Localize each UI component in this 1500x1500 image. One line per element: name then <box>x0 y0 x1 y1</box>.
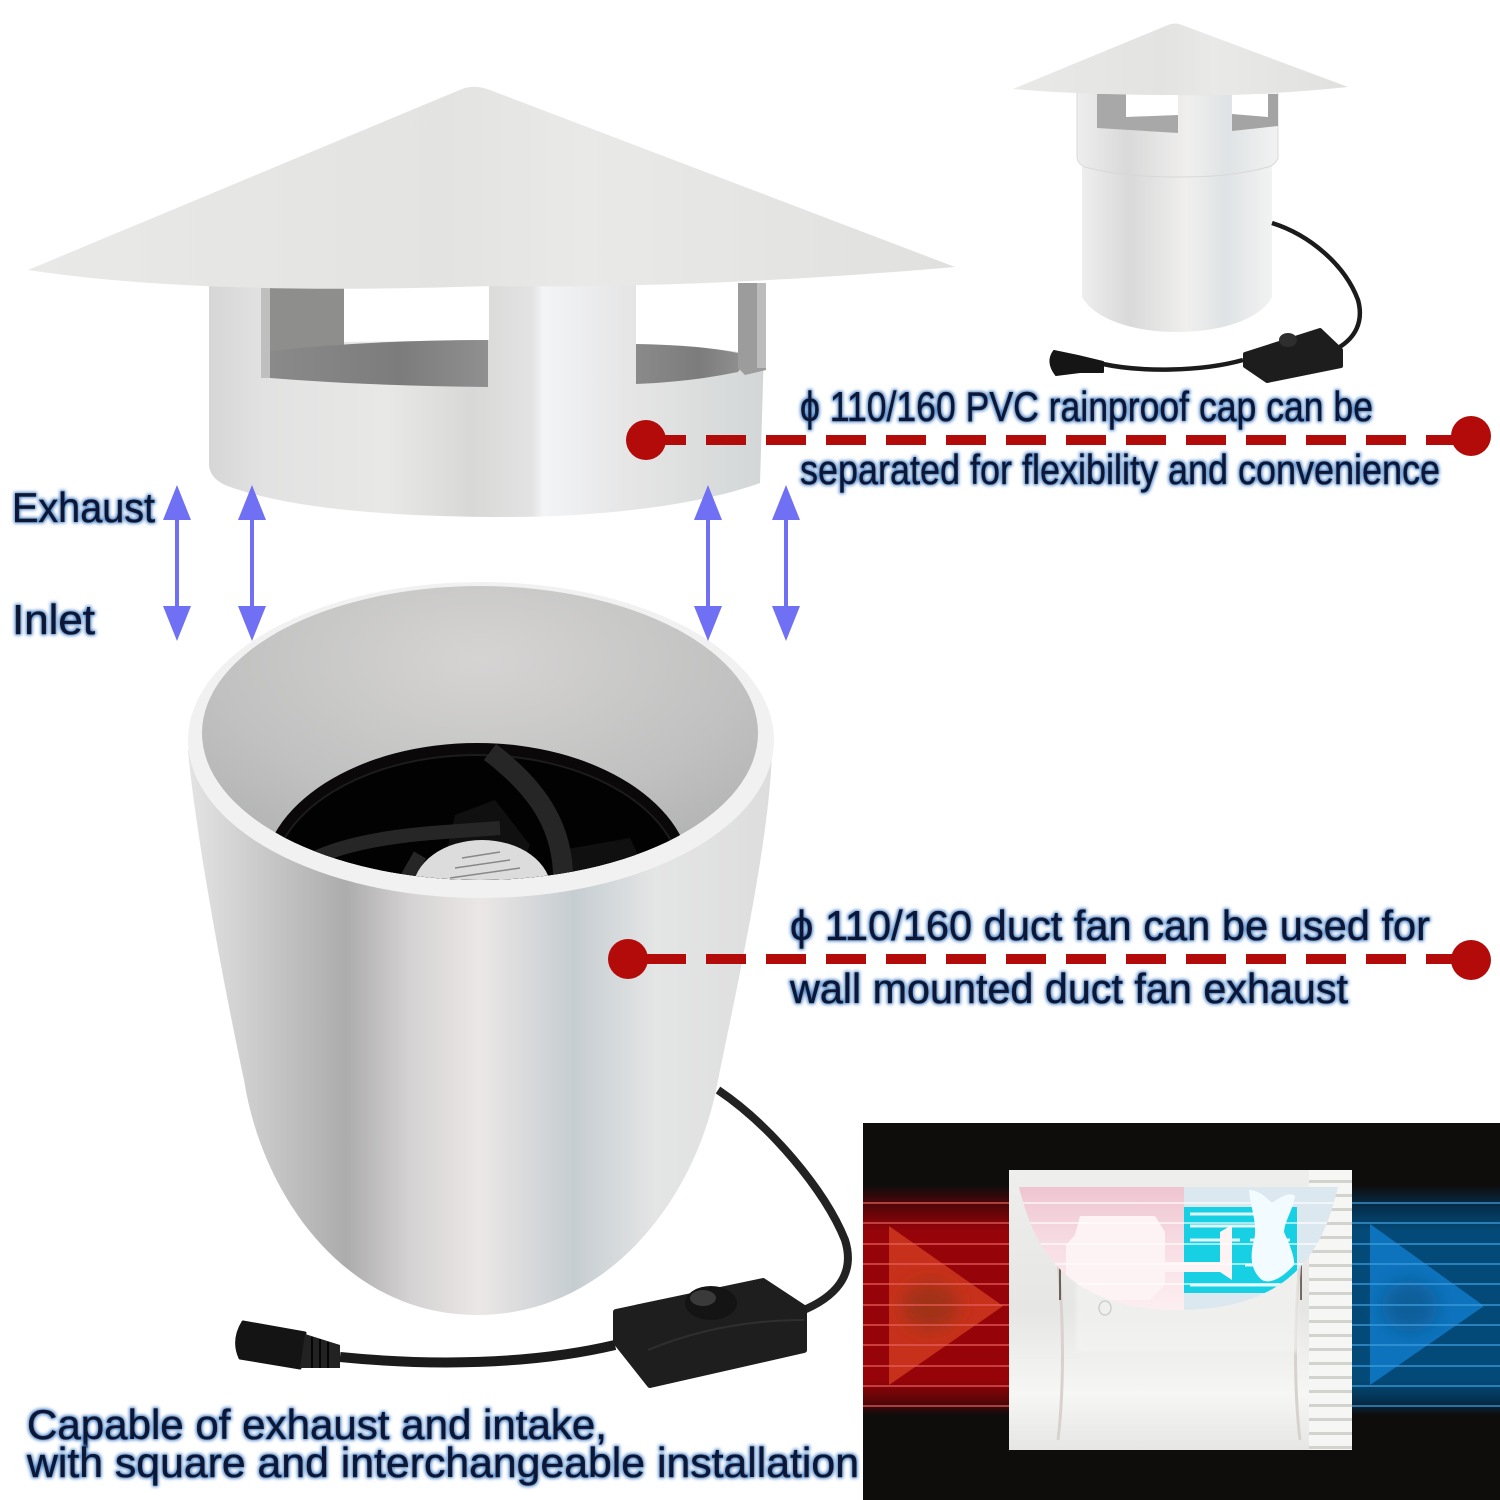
duct fan housing (large) <box>188 582 848 1315</box>
motor silhouette <box>1066 1216 1232 1292</box>
small power cable <box>1103 223 1360 370</box>
body grooves <box>1058 1262 1062 1440</box>
right vent opening <box>636 283 770 384</box>
rainproof cap (large) <box>28 87 955 517</box>
DC connector <box>237 1322 340 1368</box>
callout: duct fan <box>608 902 1491 1012</box>
left vent opening <box>261 283 489 387</box>
arrow 2 <box>238 485 266 641</box>
cap body <box>209 283 766 517</box>
switch knob <box>685 1286 737 1320</box>
inline switch and connector (large) <box>237 1281 804 1385</box>
housing interior <box>202 586 758 880</box>
cooling circuit block <box>1184 1207 1297 1293</box>
arrow 4 <box>772 485 800 641</box>
blue flow arrow <box>1370 1224 1484 1385</box>
power cable <box>718 1090 848 1312</box>
airflow arrows <box>163 485 800 641</box>
small cap vents <box>1097 94 1278 133</box>
dashed leader line <box>608 939 1491 980</box>
fan blades <box>440 800 650 880</box>
caption line 2: with square and interchangeable installation <box>26 1439 859 1486</box>
panel: airflow diagram <box>863 1123 1500 1500</box>
switch cable <box>340 1345 615 1362</box>
callout text line 2: wall mounted duct fan exhaust <box>789 965 1348 1012</box>
blue flow lines <box>1352 1203 1500 1406</box>
housing outer wall <box>188 750 772 1315</box>
dashed leader line <box>626 416 1491 460</box>
fan visible inside housing <box>276 743 680 880</box>
fan frame <box>276 743 680 880</box>
small assembled product photo <box>1013 24 1360 381</box>
fan motor label <box>416 840 548 880</box>
arrow 3 <box>694 485 722 641</box>
small DC connector <box>1050 351 1103 375</box>
fan unit body <box>1009 1170 1352 1450</box>
small fan lower body <box>1082 165 1272 332</box>
inline switch body <box>616 1281 804 1385</box>
fan spokes <box>490 752 563 885</box>
small inline switch <box>1245 330 1341 381</box>
window edge and lens mark <box>1099 1301 1111 1315</box>
small cap body <box>1077 90 1278 177</box>
hot intake band <box>863 1185 1009 1415</box>
text: exhaust label: Exhaust <box>12 484 155 531</box>
caption <box>26 1401 859 1486</box>
red flow lines <box>863 1203 1009 1406</box>
ribbed outlet <box>1309 1170 1352 1450</box>
cutaway window <box>1015 1185 1344 1315</box>
flow lines in window <box>1015 1203 1340 1284</box>
callout text line 1: ϕ 110/160 duct fan can be used for <box>790 902 1430 949</box>
red flow arrow <box>889 1226 1003 1385</box>
callout: rainproof cap <box>626 383 1491 493</box>
small switch knob <box>1279 333 1297 347</box>
arrow 1 <box>163 485 191 641</box>
cold exhaust band <box>1352 1185 1500 1415</box>
small cap roof <box>1013 24 1348 95</box>
cap roof <box>28 87 955 289</box>
housing white rim <box>188 582 774 898</box>
callout text line 1: ϕ 110/160 PVC rainproof cap can be <box>800 383 1373 430</box>
fan blade <box>1249 1190 1295 1281</box>
text: inlet label: Inlet <box>12 596 95 643</box>
caption line 1: Capable of exhaust and intake, <box>27 1401 607 1448</box>
